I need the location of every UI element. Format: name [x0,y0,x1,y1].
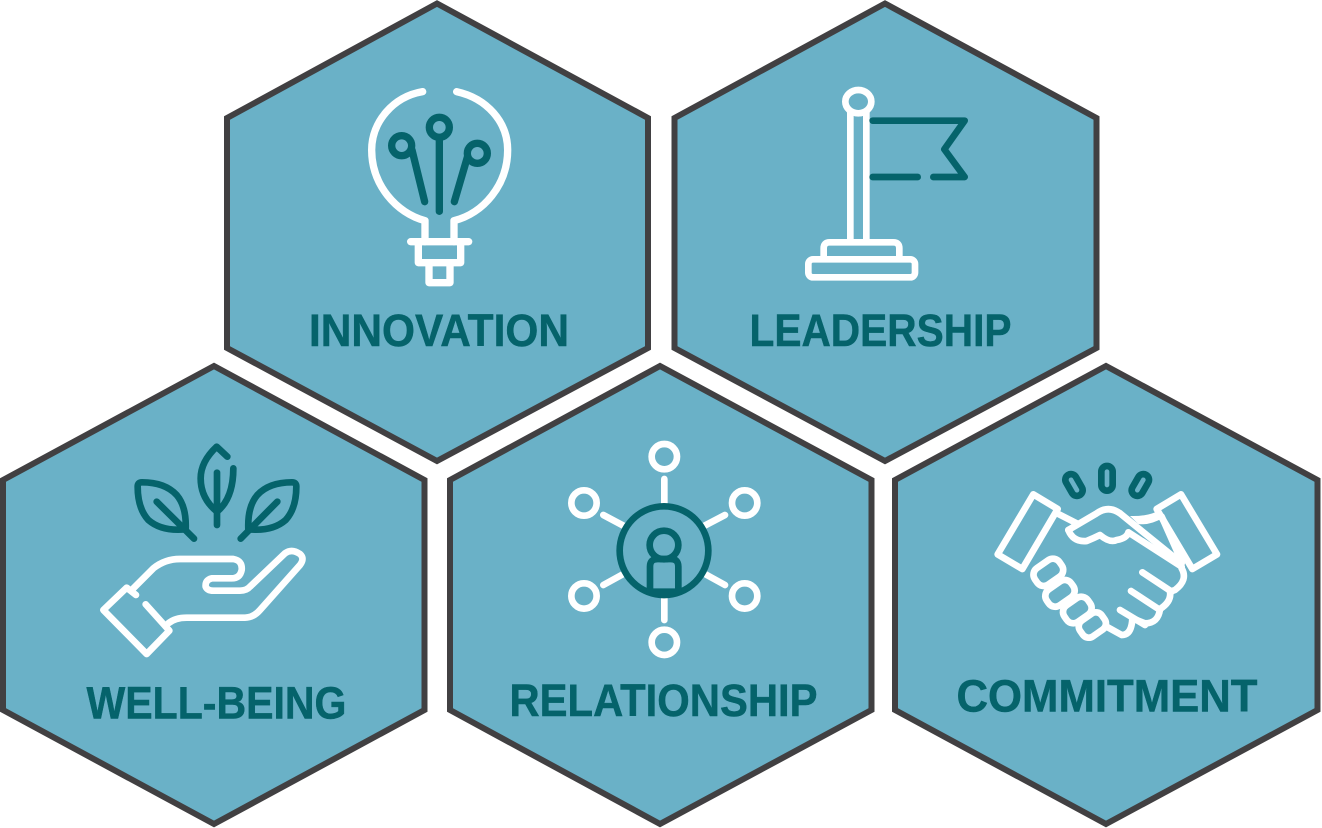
panel: relationship [450,366,872,824]
hexagon: leadership [674,4,1096,461]
panel: commitment [895,366,1318,824]
panel: well-being [3,366,424,824]
label: well-being: WELL-BEING [86,678,346,728]
label: innovation: INNOVATION [309,305,569,356]
icon: flag [808,90,965,277]
icon: handshake [998,466,1217,641]
panel: innovation [227,4,648,461]
label: leadership: LEADERSHIP [750,305,1012,356]
label: commitment: COMMITMENT [956,670,1258,722]
hexagon: commitment [895,366,1318,824]
icon: light bulb [372,92,508,283]
hexagon: innovation [227,4,648,461]
panel: leadership [674,4,1096,461]
icon: person network [571,444,757,655]
hexagon: well-being [3,366,424,824]
label: relationship: RELATIONSHIP [510,675,818,726]
hexagon: relationship [450,366,872,824]
icon: hand with leaves [103,447,302,654]
